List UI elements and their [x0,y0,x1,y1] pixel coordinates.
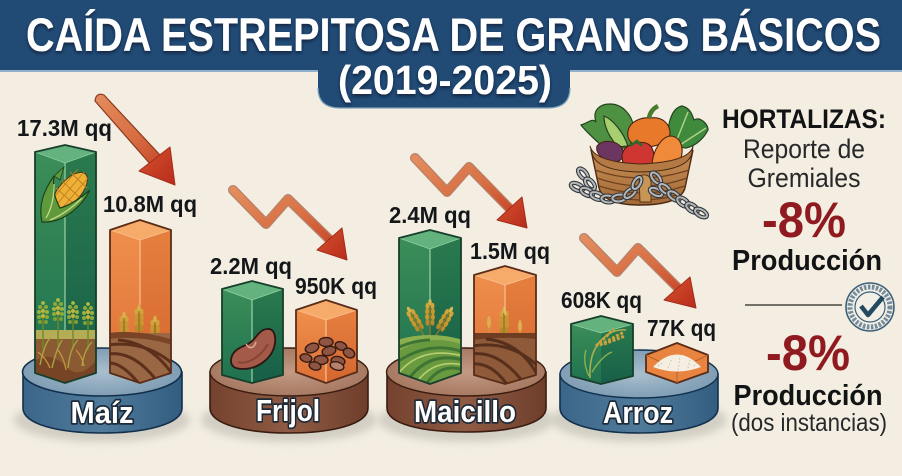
value: 1.5M qq: 1.5M qq [470,238,550,264]
icon: corn [41,167,94,222]
platform: Maíz [22,348,182,433]
leaves [581,104,708,148]
icon: bean [231,329,275,369]
text: Reporte de Gremiales: Gremiales [748,163,860,193]
text: Reporte de Gremiales: Reporte de [743,134,865,164]
icon: verified seal [846,283,894,331]
value: 17.3M qq: 17.3M qq [17,115,112,141]
platform: Maicillo [386,348,546,432]
bar: Frijol 2025 [296,300,357,383]
basket [591,150,693,205]
label: Arroz: Arroz [603,395,673,430]
stat label: Producción second: Producción [734,380,882,412]
label: Maicillo: Maicillo [414,394,516,429]
subtitle: years: (2019-2025) [338,57,552,103]
arrow: Maicillo [415,158,527,228]
value: 77K qq: 77K qq [647,315,716,341]
panel: Frijol [201,190,377,442]
value: 10.8M qq: 10.8M qq [103,191,197,217]
bar: Maíz 2019 [33,145,98,385]
bar: Arroz 2019 [571,316,633,384]
icon: rice pile [653,354,701,372]
text: Reporte de Gremiales [743,134,865,193]
arrow: Maíz [95,94,175,185]
platform: Frijol [210,348,368,433]
panel: Maicillo [378,158,554,442]
icon: vegetable basket with broken chain [570,104,708,219]
icon: rice plant [585,329,626,378]
arrow: Frijol [233,190,347,260]
bar: Frijol 2019 [222,281,283,383]
heading: Hortalizas: HORTALIZAS: [722,104,886,134]
bar: Arroz 2025 [646,343,708,383]
chain [570,167,708,219]
panel: Maíz [14,94,197,442]
value: 608K qq: 608K qq [561,287,642,313]
bar: Maicillo 2025 [472,266,538,386]
stat label: Producción: Producción [732,245,882,277]
value: 950K qq: 950K qq [295,273,377,299]
stat: -8%: -8% [762,192,846,248]
platform: Arroz [560,350,718,433]
note: dos instancias: (dos instancias) [731,409,887,437]
arrow: Arroz [584,238,696,308]
bar: Maicillo 2019 [397,230,463,386]
header banner [0,0,902,108]
vegetables [597,106,682,164]
value: 2.2M qq: 2.2M qq [210,253,292,279]
icon: beans pile [299,338,356,372]
label: Frijol: Frijol [256,393,320,428]
value: 2.4M qq: 2.4M qq [389,202,471,228]
bar: Maíz 2025 [108,220,173,385]
stat: -8% second: -8% [766,325,850,381]
label: Maíz: Maíz [70,395,134,430]
divider [745,304,842,306]
panel: Arroz [551,238,727,442]
